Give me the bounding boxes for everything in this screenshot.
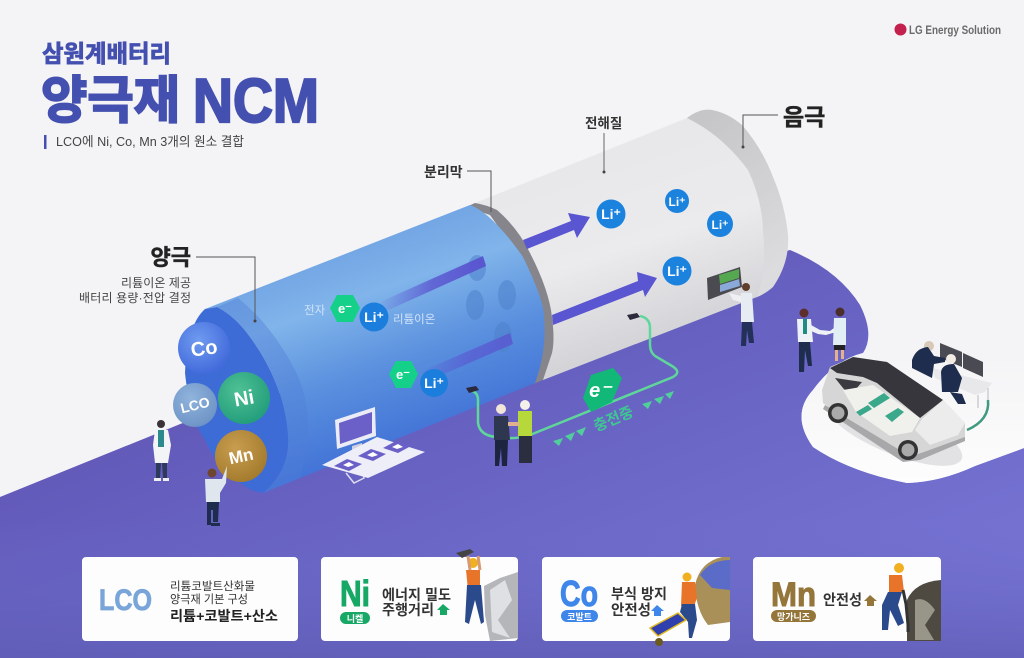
atom: Ni: Ni	[232, 386, 256, 412]
title: main heading	[41, 67, 319, 136]
label: electrolyte: 전해질	[585, 116, 622, 131]
label: cathode	[79, 245, 256, 322]
electron lower: e⁻	[396, 367, 410, 382]
card: Co: 부식 방지	[611, 586, 667, 603]
arrow: upper	[523, 213, 590, 249]
electron hexagon: e⁻	[589, 380, 613, 402]
holes	[466, 255, 516, 352]
ion 4: Li⁺	[667, 263, 687, 279]
title block	[41, 41, 319, 149]
card: Mn: Mn	[771, 576, 816, 614]
pill: manganese: 망가니즈	[777, 611, 810, 622]
operators at desk	[912, 341, 992, 430]
figure: wheelbarrow worker	[650, 572, 697, 646]
pill: cobalt	[561, 610, 598, 622]
ion 2: Li⁺	[668, 195, 686, 209]
icon: up arrow	[651, 605, 664, 616]
card: LCO: LCO	[99, 584, 152, 617]
lithium upper	[360, 302, 388, 332]
car	[820, 357, 970, 479]
rock: manganese	[907, 580, 941, 641]
person: handshake	[797, 308, 846, 372]
person: scientist at display	[729, 283, 754, 346]
current label: 충전중	[591, 403, 636, 435]
anode end cap	[687, 110, 788, 310]
electron and ion labels on cathode	[304, 295, 448, 397]
background floor	[0, 250, 1024, 658]
card: Ni: 주행거리	[382, 602, 434, 619]
electrolyte section	[475, 118, 764, 380]
card: LCO: 리튬+코발트+산소	[170, 608, 278, 624]
label: cathode: 배터리 용량·전압 결정	[79, 291, 191, 305]
electron and ion labels on cathode: 전자	[304, 304, 326, 317]
atom: LCO	[173, 383, 217, 427]
white car platform	[802, 353, 1024, 483]
card: Ni	[321, 549, 518, 641]
arrows right	[642, 391, 674, 409]
arrows left	[553, 427, 586, 446]
person: scientist left	[153, 420, 171, 481]
label: separator	[424, 164, 491, 212]
atom: Mn	[215, 430, 267, 482]
card: Co: Co	[560, 573, 598, 614]
rock: nickel	[484, 572, 518, 641]
separator ring	[466, 203, 554, 384]
title: small heading: 삼원계배터리	[42, 41, 171, 68]
cathode body	[205, 205, 545, 493]
card: LCO: 양극재 기본 구성	[170, 593, 248, 606]
card: Co	[542, 557, 730, 646]
atom: LCO: LCO	[179, 394, 211, 416]
electron upper: e⁻	[338, 301, 352, 316]
atom: Mn: Mn	[227, 445, 255, 468]
lithium lower: Li⁺	[424, 375, 444, 391]
lithium upper: Li⁺	[364, 309, 384, 325]
electron and ion labels on cathode: 리튬이온	[393, 313, 435, 326]
card: Ni: Ni	[340, 573, 370, 614]
card: Mn	[753, 557, 941, 641]
figure: driller	[882, 563, 908, 632]
lithium ions in electrolyte	[596, 189, 733, 286]
card: Co: 안전성	[611, 602, 651, 619]
electron upper	[330, 295, 360, 322]
label: cathode: 리튬이온 제공	[121, 276, 191, 290]
lithium lower	[420, 369, 448, 397]
figure: miner	[456, 549, 484, 624]
card: Ni: 에너지 밀도	[382, 587, 451, 604]
label: electrolyte	[585, 116, 622, 174]
wall display	[707, 267, 742, 300]
ion 1: Li⁺	[601, 206, 621, 222]
rock: cobalt	[695, 557, 730, 625]
pill: nickel: 니켈	[347, 613, 363, 624]
ion 3: Li⁺	[712, 218, 728, 232]
atom: Ni	[218, 372, 270, 424]
pill: nickel	[340, 612, 370, 624]
icon: up arrow	[864, 595, 877, 606]
card: LCO: 리튬코발트산화물	[170, 580, 255, 593]
LG Energy Solution logo	[894, 24, 1001, 37]
title: main heading: NCM	[193, 67, 319, 136]
holographic device	[322, 407, 425, 483]
subtitle: LCO에 Ni, Co, Mn 3개의 원소 결합	[56, 134, 244, 149]
atom: Co	[178, 322, 230, 374]
pill: manganese	[771, 610, 816, 622]
person: workers	[494, 400, 532, 466]
cathode front face	[185, 307, 288, 493]
electron hexagon	[583, 368, 622, 412]
label: separator: 분리막	[424, 164, 463, 180]
pill: cobalt: 코발트	[567, 611, 592, 622]
label: anode	[742, 104, 825, 148]
label: anode: 음극	[783, 104, 825, 130]
card: Mn: 안전성	[823, 592, 862, 609]
icon: up arrow	[437, 604, 450, 615]
title: main heading: 양극재	[41, 72, 180, 129]
card: LCO	[82, 557, 298, 641]
atom: Co: Co	[189, 336, 219, 362]
battery cylinder	[185, 110, 788, 493]
label: cathode: 양극	[151, 245, 191, 270]
atoms	[173, 322, 270, 482]
ion arrow inside lower	[420, 333, 513, 380]
cathode inner shading	[217, 298, 308, 493]
person: scientist pushing Mn	[205, 466, 227, 526]
electron wire	[466, 313, 677, 446]
ion arrow inside upper	[378, 256, 486, 312]
arrow: lower	[552, 272, 657, 325]
LG Energy Solution logo: LG Energy Solution	[909, 25, 1001, 37]
electron lower	[389, 361, 418, 388]
